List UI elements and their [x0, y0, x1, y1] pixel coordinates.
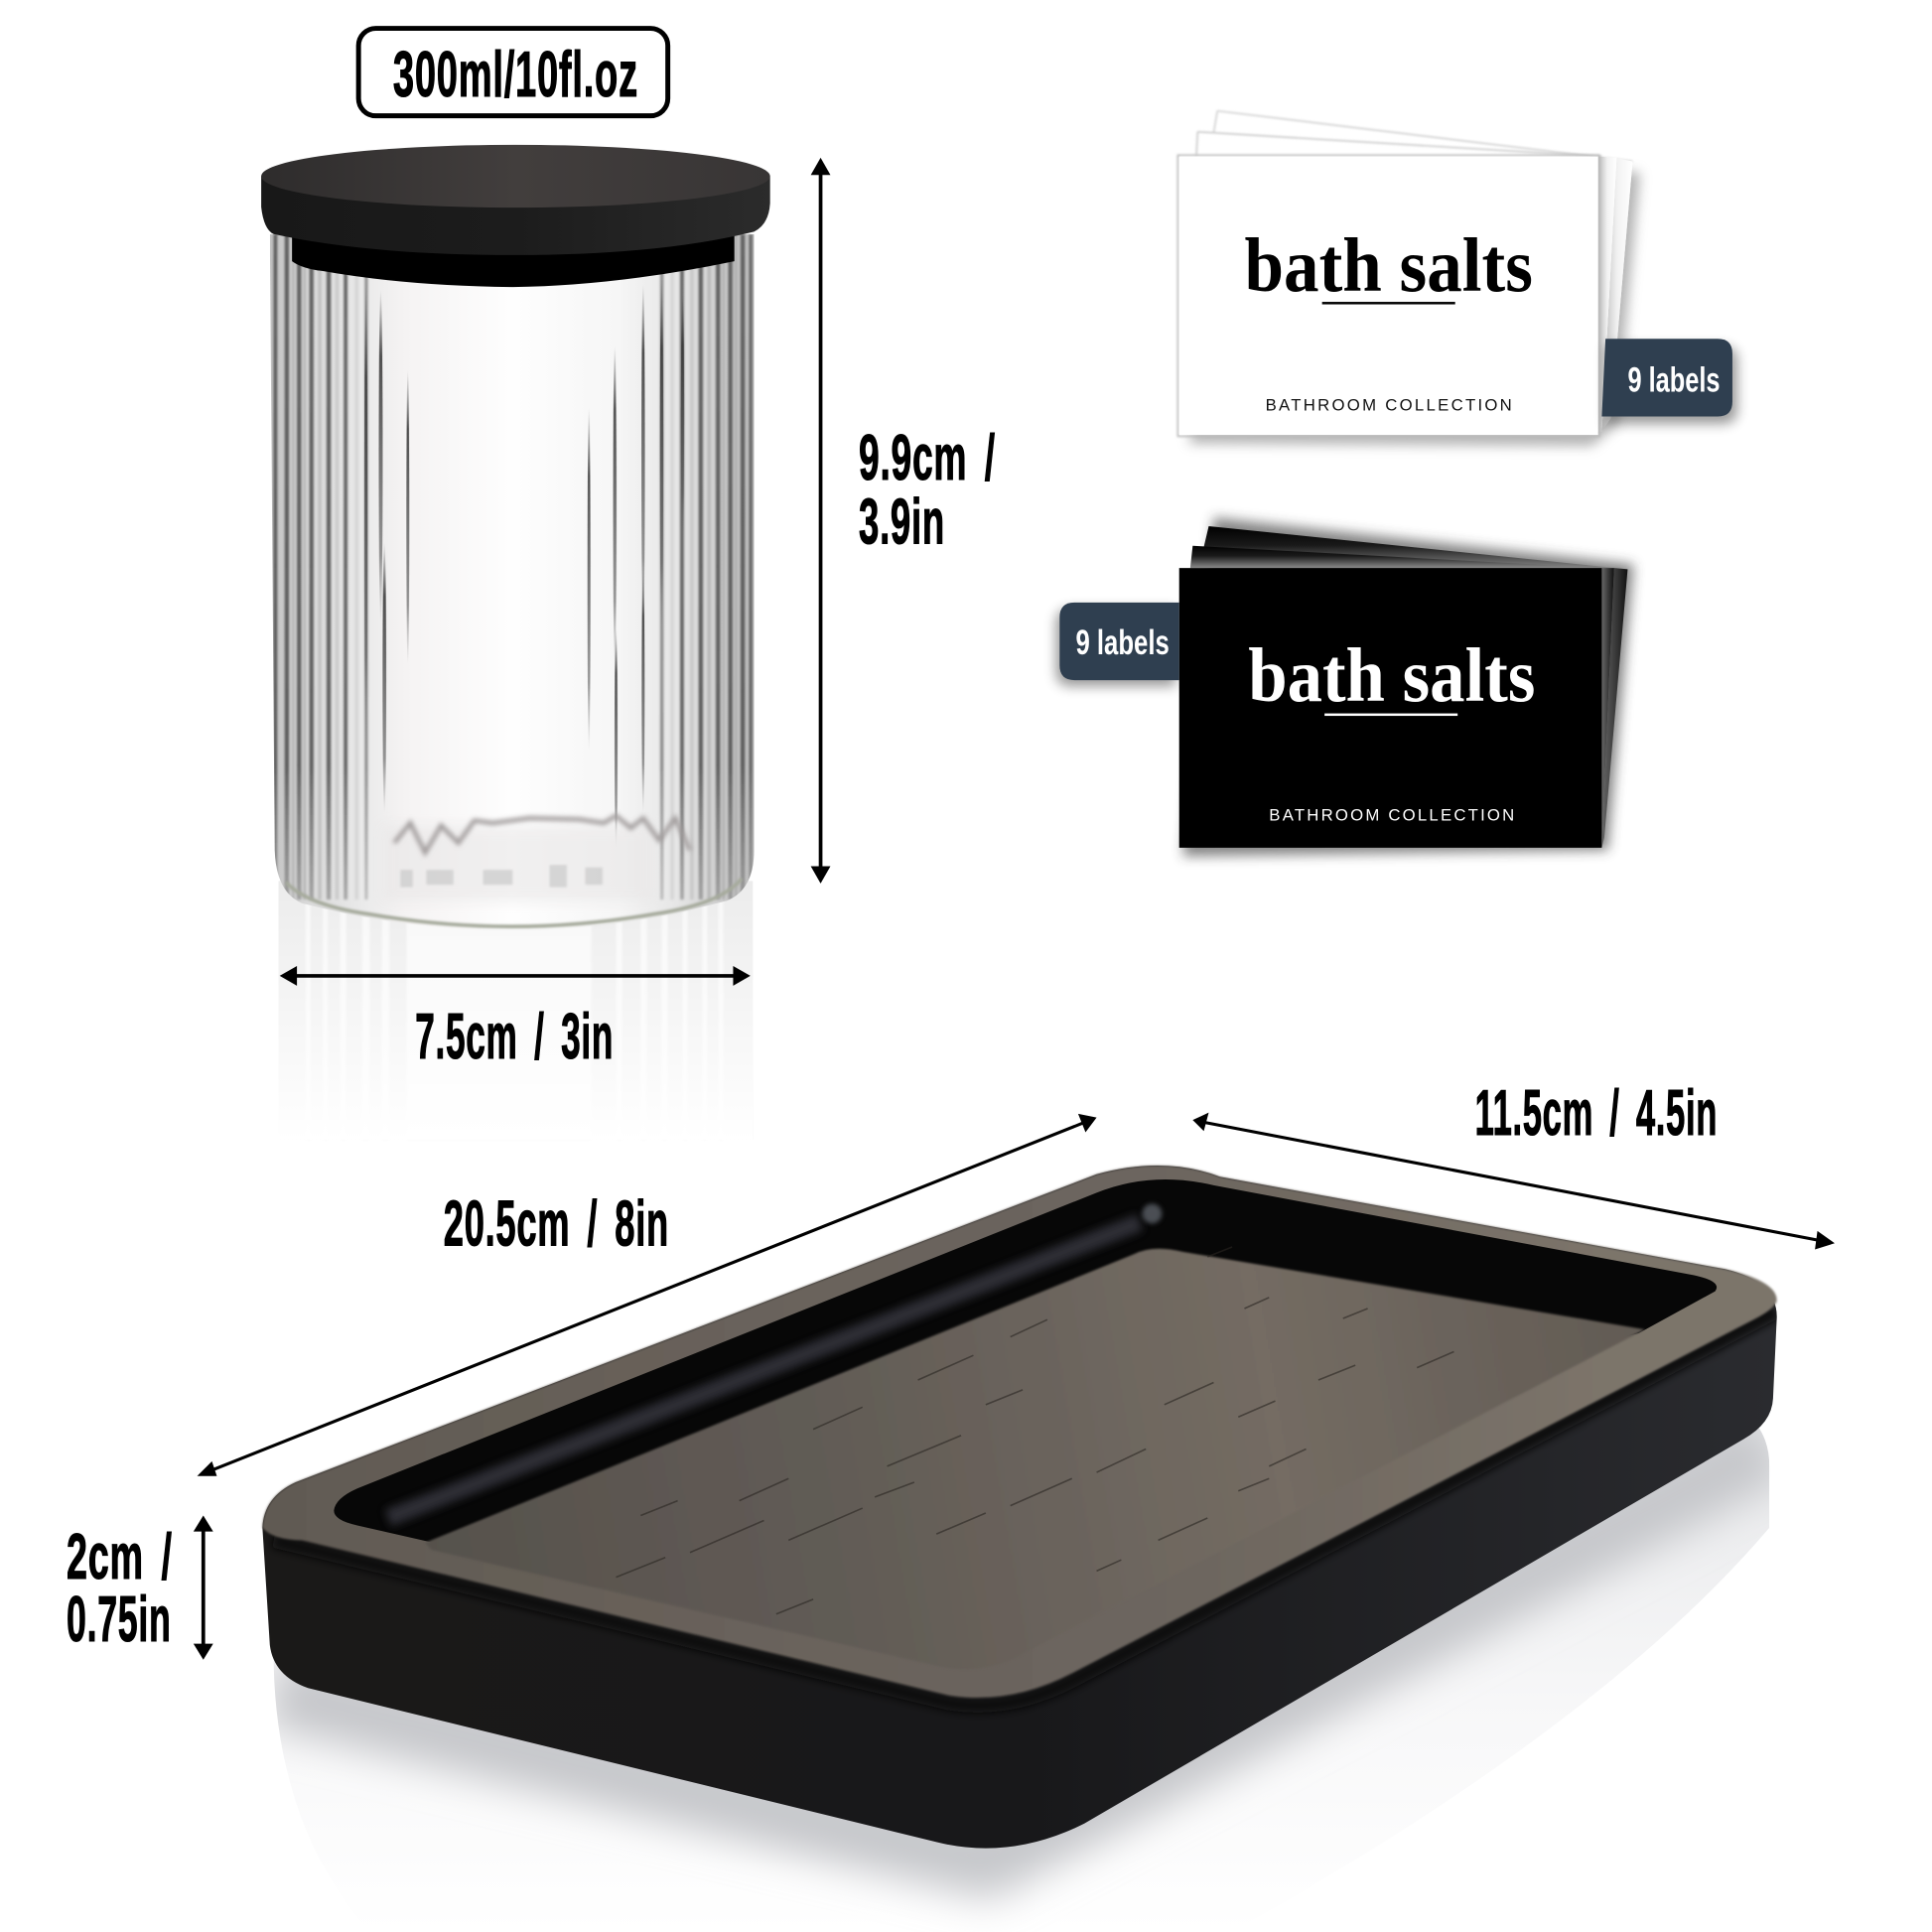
dimension: jar height 9.9cm / 3.9in	[859, 422, 996, 557]
black front card	[1179, 568, 1601, 848]
dimension: jar width 7.5cm / 3in: 7.5cm / 3in	[415, 1001, 614, 1072]
badge: 9 labels (black set): 9 labels	[1075, 624, 1170, 662]
white front card	[1179, 157, 1598, 435]
arrow: jar height	[811, 158, 830, 884]
jar reflection on surface	[278, 881, 753, 1140]
arrow: tray width	[1192, 1113, 1835, 1249]
arrow: tray length	[198, 1114, 1097, 1476]
thin refraction highlights	[364, 277, 684, 850]
tray floor	[425, 1249, 1645, 1669]
wood grain	[617, 1247, 1453, 1614]
capacity badge: 300ml/10fl.oz	[358, 29, 668, 116]
side top shadow band	[274, 1311, 1777, 1705]
lid black seal	[292, 229, 735, 287]
dimension: tray length 20.5cm / 8in: 20.5cm / 8in	[444, 1188, 669, 1260]
dimension: jar height 9.9cm / 3.9in: 9.9cm /	[859, 422, 996, 493]
white label card stack	[1177, 111, 1640, 446]
tray reflection	[274, 1417, 1769, 1932]
black front card: BATHROOM COLLECTION	[1269, 806, 1514, 825]
badge: 9 labels (black set)	[1056, 603, 1179, 686]
recess sheen	[388, 1222, 1140, 1518]
tray outer side	[262, 1166, 1777, 1849]
badge: 9 labels (white set): 9 labels	[1627, 362, 1721, 400]
black label card stack	[1179, 517, 1634, 857]
wooden tray	[262, 1166, 1777, 1849]
tray rim top face	[262, 1166, 1777, 1698]
glass ribs	[274, 234, 753, 899]
lid top surface	[261, 145, 770, 207]
dimension: jar height 9.9cm / 3.9in: 3.9in	[859, 485, 945, 557]
jar lid	[261, 145, 770, 287]
dimension: tray width 11.5cm / 4.5in: 11.5cm / 4.5in	[1475, 1077, 1718, 1149]
jar base refraction	[382, 816, 690, 901]
dimension: tray height 2cm / 0.75in	[67, 1521, 173, 1655]
white front card: bath salts	[1244, 222, 1533, 308]
lid side	[261, 176, 770, 255]
dimension: tray height 2cm / 0.75in: 0.75in	[67, 1584, 172, 1655]
capacity badge: 300ml/10fl.oz: 300ml/10fl.oz	[393, 39, 638, 110]
white front card: BATHROOM COLLECTION	[1266, 395, 1512, 414]
arrow: tray height	[194, 1516, 213, 1660]
tray recess walls	[334, 1179, 1717, 1545]
black front card: bath salts	[1248, 632, 1535, 718]
glass jar body	[270, 234, 755, 930]
arrow: jar width	[280, 966, 751, 986]
badge: 9 labels (white set)	[1601, 339, 1737, 424]
dimension: tray height 2cm / 0.75in: 2cm /	[67, 1521, 173, 1592]
